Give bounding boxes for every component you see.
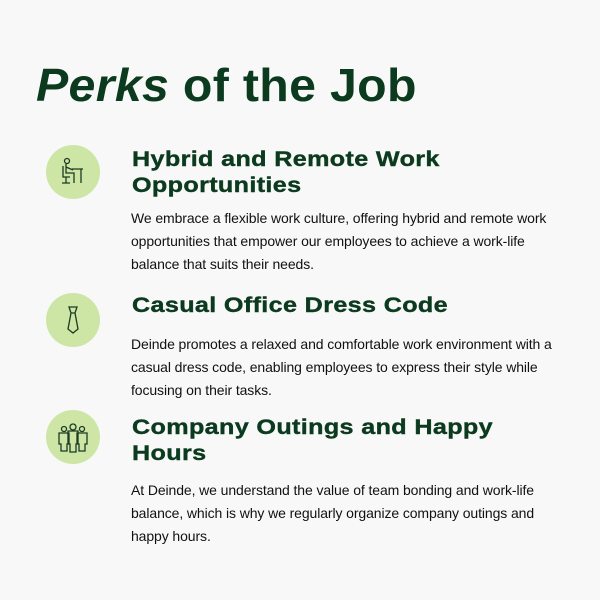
heading: outings: Hours: [132, 441, 206, 465]
icon: team: [46, 410, 100, 464]
icon: desk worker: [46, 145, 100, 199]
text: hybrid: balance that suits their needs.: [131, 256, 314, 272]
text: dress code: casual dress code, enabling employees to express their style while: [131, 359, 538, 375]
text: outings: balance, which is why we regularly organize company outings and: [131, 505, 534, 521]
title: Perks of the Job: [36, 59, 417, 111]
text: hybrid: We embrace a flexible work culture, offering hybrid and remote work: [131, 210, 546, 226]
text: outings: At Deinde, we understand the value of team bonding and work-life: [131, 482, 534, 498]
heading: hybrid: Hybrid and Remote Work: [132, 147, 440, 171]
heading: hybrid: [132, 147, 440, 197]
heading: dress code: Casual Office Dress Code: [132, 293, 448, 317]
heading: outings: Company Outings and Happy: [132, 415, 493, 439]
text: outings: happy hours.: [131, 528, 211, 544]
text: hybrid: [131, 210, 546, 272]
heading: hybrid: Opportunities: [132, 173, 301, 197]
icon: tie: [46, 293, 100, 347]
heading: outings: [132, 415, 493, 465]
text: dress code: focusing on their tasks.: [131, 382, 272, 398]
text: dress code: [131, 336, 552, 398]
text: dress code: Deinde promotes a relaxed and comfortable work environment with a: [131, 336, 552, 352]
text: outings: [131, 482, 534, 544]
text: hybrid: opportunities that empower our employees to achieve a work-life: [131, 233, 525, 249]
